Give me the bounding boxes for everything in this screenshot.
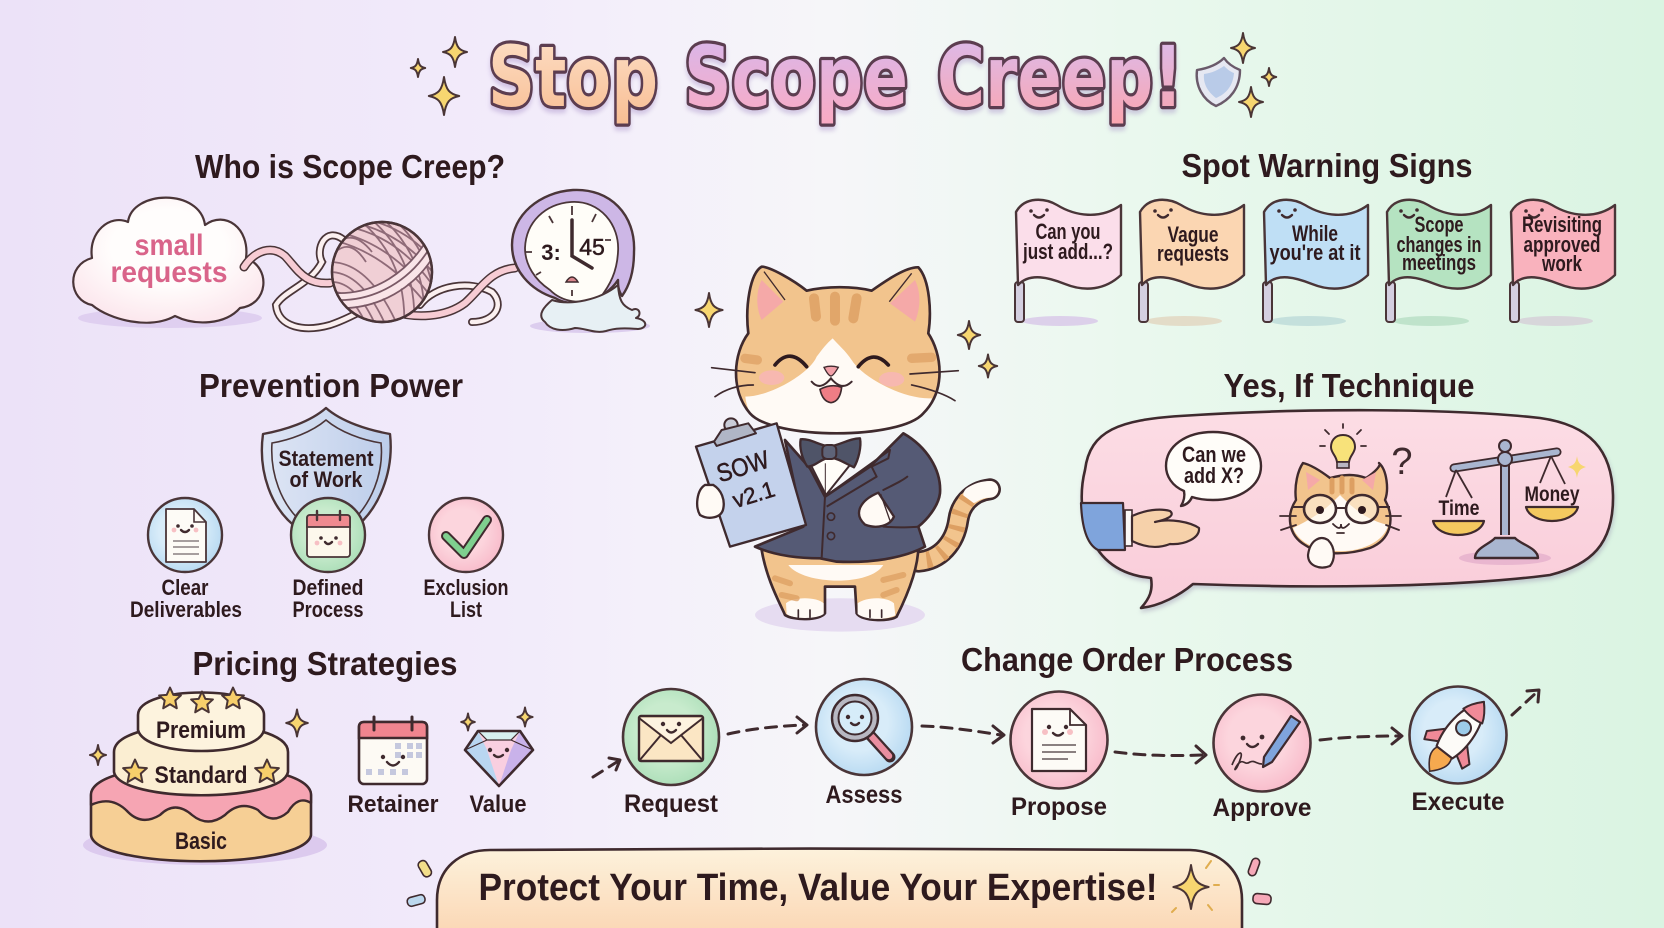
icon: flag revisiting approved work: approved [1524, 232, 1600, 257]
icon: cloud with small requests [73, 198, 263, 328]
cat jacket [755, 433, 940, 562]
label: defined process: Defined [292, 575, 364, 600]
label: exclusion list [424, 575, 508, 622]
confetti right pink [1253, 893, 1271, 905]
icon: cloud with small requests: requests [110, 256, 228, 289]
step: request [623, 689, 719, 818]
footer banner [406, 848, 1271, 928]
panel: prevention power [130, 367, 508, 622]
cat tail [918, 489, 990, 562]
icon: title sparkle [1262, 68, 1276, 86]
icon: melting clock: 3: [541, 240, 561, 265]
icon: scale sparkle [1568, 456, 1586, 478]
cat bow tie [800, 438, 860, 467]
label: clear deliverables: Deliverables [130, 597, 242, 622]
panel: change order process [593, 641, 1539, 822]
arrow: assess to propose [922, 726, 1004, 743]
icon: three tier cake [83, 688, 327, 865]
panel: yes, if technique [1081, 367, 1613, 608]
panel: pricing strategies [83, 645, 533, 865]
confetti left yellow [417, 859, 433, 878]
icon: flag can you just add: just add...? [1022, 239, 1113, 264]
icon: flag scope changes in meetings: Scope [1414, 212, 1464, 237]
icon: cake star [222, 688, 244, 708]
step: assess: Assess [826, 781, 902, 809]
icon: lightbulb [1320, 424, 1366, 468]
icon: cake star [191, 692, 213, 712]
icon: exclusion list [429, 498, 503, 572]
label: exclusion list: Exclusion [424, 575, 508, 600]
icon: cake sparkle [90, 745, 106, 765]
icon: sparkle rays [1172, 861, 1219, 912]
arrow: out of execute [1512, 690, 1539, 715]
confetti left blue [406, 894, 426, 907]
icon: flag scope changes in meetings: meetings [1402, 250, 1476, 275]
heading: pricing strategies: Pricing Strategies [192, 645, 458, 682]
clipboard with SOW v2.1 [696, 418, 806, 547]
icon: statement of work shield: Statement [278, 446, 374, 471]
cat left paw [697, 485, 724, 518]
heading: yes, if technique: Yes, If Technique [1224, 367, 1474, 404]
heading: who is scope creep: Who is Scope Creep? [195, 148, 505, 185]
title word: Stop: Stop [488, 28, 658, 126]
title word: Creep!: Creep! [937, 28, 1183, 126]
arrow: into request [593, 758, 620, 777]
icon: retainer calendar [359, 717, 427, 784]
icon: cloud with small requests: small [134, 229, 204, 262]
icon: defined process [291, 498, 365, 572]
icon: statement of work shield [262, 408, 391, 530]
label: clear deliverables [130, 575, 242, 622]
icon: melting clock [512, 190, 650, 333]
banner shape [437, 848, 1242, 928]
cake tier: standard [114, 724, 288, 795]
label: exclusion list: List [450, 597, 483, 622]
icon: clear deliverables [148, 498, 222, 572]
title word: Scope: Scope [684, 28, 908, 126]
inner speech bubble: can we add X?: add X? [1184, 463, 1244, 488]
icon: balance scale time and money: Money [1524, 483, 1580, 506]
icon: banner sparkle [1173, 865, 1209, 909]
icon: flag can you just add: Can you [1036, 219, 1100, 244]
client hand [1081, 503, 1199, 550]
banner text: Protect Your Time, Value Your Expertise! [478, 867, 1158, 909]
clipboard with SOW v2.1: SOW [713, 446, 773, 488]
icon: title sparkle [443, 37, 467, 67]
icon: value diamond [465, 731, 533, 786]
step: propose: Propose [1011, 793, 1107, 821]
icon: balance scale time and money [1433, 440, 1580, 565]
icon: cat sparkle [695, 293, 723, 327]
heading: change order process: Change Order Process [961, 641, 1293, 678]
icon: balance scale time and money: Time [1438, 497, 1480, 520]
cat legs and belly [762, 547, 918, 620]
icon: small shield [1197, 58, 1240, 106]
cat right paw [859, 493, 894, 527]
icon: title sparkle [1239, 87, 1263, 117]
inner speech bubble: can we add X?: Can we [1182, 442, 1246, 467]
arrow: request to assess [728, 717, 807, 734]
panel: spot warning signs [1015, 147, 1615, 326]
icon: flag scope changes in meetings: changes in [1396, 232, 1482, 257]
step: execute: Execute [1412, 788, 1505, 816]
step: approve: Approve [1212, 794, 1312, 822]
inner speech bubble: can we add X? [1166, 432, 1261, 506]
icon: flag vague requests: requests [1157, 241, 1229, 266]
step: assess [816, 679, 912, 809]
icon: title sparkle [1231, 33, 1255, 63]
cake tier: premium [138, 692, 264, 751]
icon: flag while you're at it: you're at it [1270, 240, 1361, 265]
speech bubble background [1082, 410, 1613, 608]
icon: melting clock: 45 [579, 234, 605, 260]
icon: cake sparkle [286, 710, 308, 736]
icon: flag revisiting approved work [1510, 200, 1615, 326]
icon: cake star [123, 760, 147, 782]
icon: diamond sparkle [517, 708, 533, 726]
thinking cat with glasses [1280, 463, 1401, 568]
label: value: Value [470, 791, 526, 818]
question mark: ? [1391, 441, 1413, 483]
icon: cake star [159, 688, 181, 708]
step: approve [1212, 694, 1312, 822]
icon: flag revisiting approved work: work [1541, 251, 1583, 276]
icon: cat in tuxedo holding SOW clipboard [696, 267, 990, 632]
title [411, 28, 1276, 126]
icon: flag scope changes in meetings [1386, 200, 1491, 326]
icon: statement of work shield: of Work [290, 467, 363, 492]
heading: spot warning signs: Spot Warning Signs [1182, 147, 1472, 184]
label: retainer: Retainer [348, 791, 438, 818]
cake tier: basic: Basic [175, 828, 227, 855]
icon: cat sparkle [979, 354, 997, 378]
icon: cake star [255, 760, 279, 782]
arrow: propose to approve [1115, 746, 1206, 763]
panel: mascot cat [695, 267, 997, 632]
cake tier: premium: Premium [156, 717, 246, 744]
step: propose [1010, 692, 1108, 821]
icon: flag revisiting approved work: Revisiting [1522, 212, 1602, 237]
icon: rocket [1408, 685, 1505, 788]
arrow: approve to execute [1320, 728, 1402, 744]
icon: diamond sparkle [461, 714, 475, 730]
heading: prevention power: Prevention Power [199, 367, 463, 404]
panel: who is scope creep [73, 148, 650, 333]
icon: title sparkle [411, 59, 425, 77]
icon: flag vague requests: Vague [1168, 222, 1218, 247]
label: defined process [292, 575, 364, 622]
icon: title sparkle [429, 77, 459, 115]
confetti right pink [1247, 857, 1261, 877]
icon: flag vague requests [1139, 200, 1244, 326]
label: defined process: Process [292, 597, 364, 622]
label: clear deliverables: Clear [162, 575, 209, 600]
clipboard with SOW v2.1: v2.1 [729, 476, 778, 513]
icon: tangled yarn ball [244, 218, 515, 330]
icon: flag can you just add [1015, 200, 1121, 326]
cat head [712, 267, 958, 433]
step: request: Request [624, 790, 719, 818]
icon: flag while you're at it [1263, 200, 1368, 326]
cake tier: basic [91, 765, 311, 861]
icon: flag while you're at it: While [1292, 221, 1338, 246]
step: execute [1408, 685, 1506, 816]
cake tier: standard: Standard [154, 762, 248, 789]
icon: cat sparkle [958, 321, 980, 349]
